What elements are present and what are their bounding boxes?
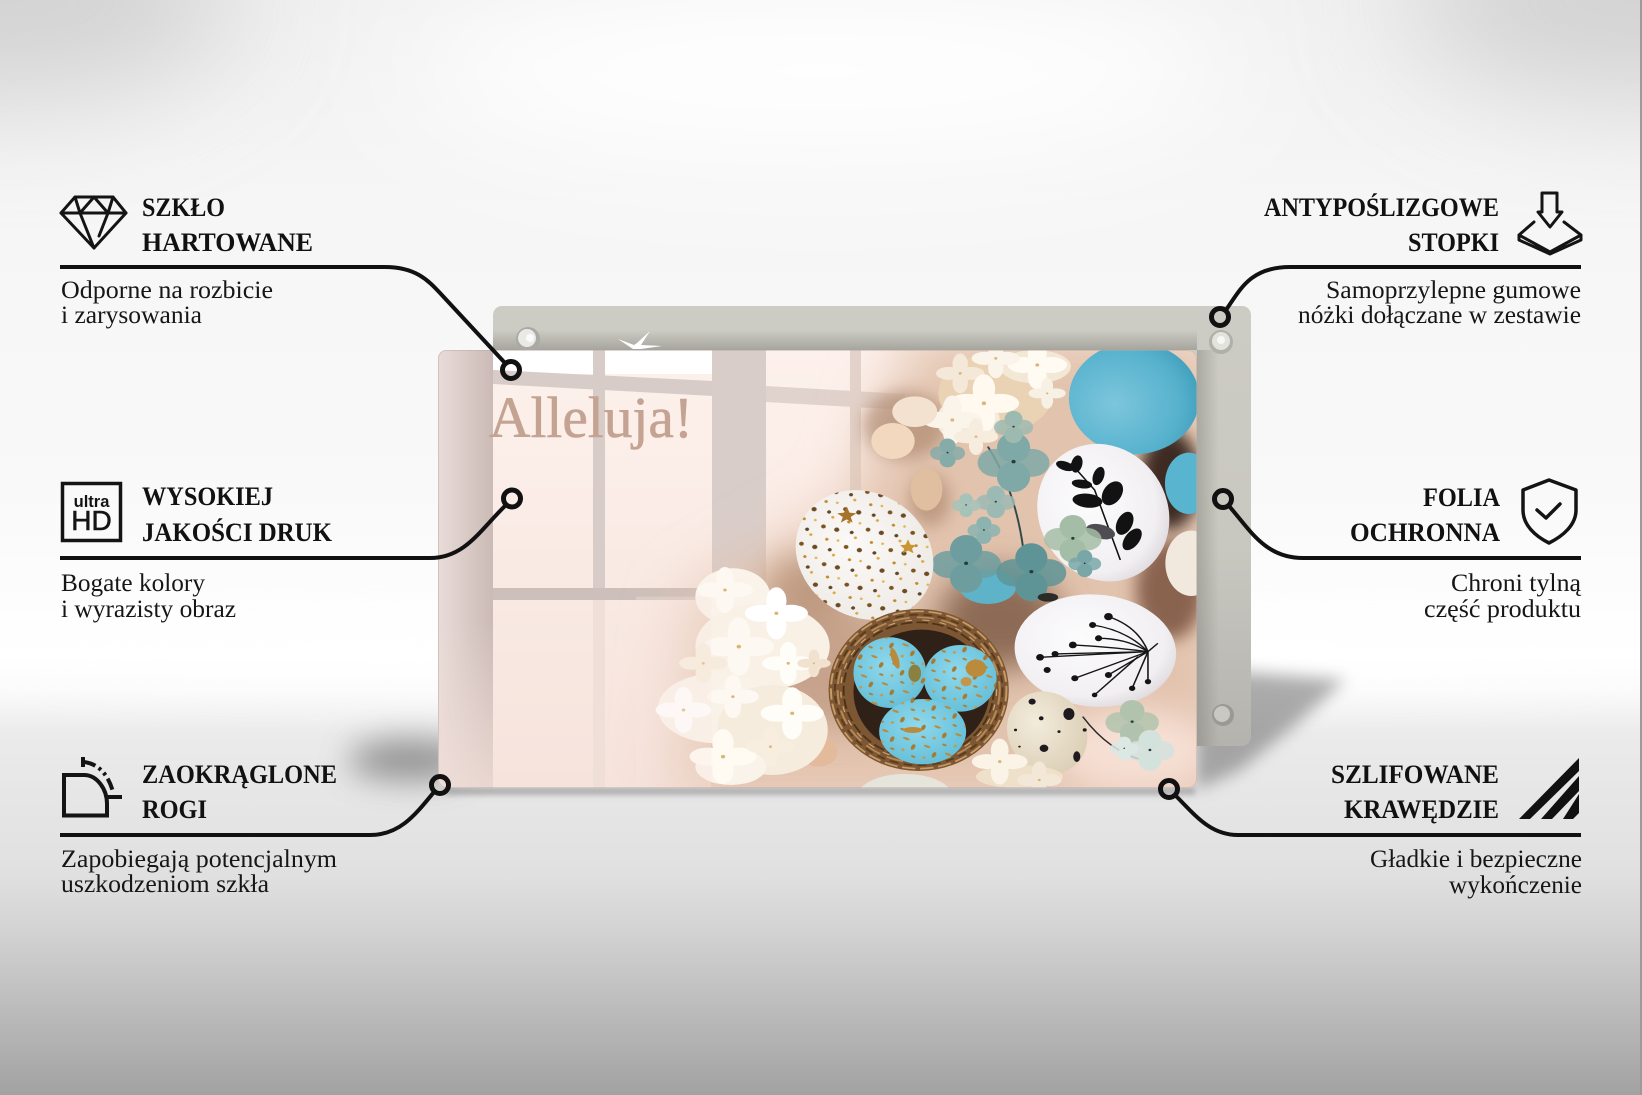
icon: ultra HD: ultra (74, 493, 110, 511)
icon: small tan eggs (800, 396, 942, 767)
icon: diagonal stripes (1519, 758, 1579, 819)
heading: JAKOŚCI DRUK (142, 518, 333, 547)
heading: STOPKI (1408, 228, 1499, 257)
heading (1264, 193, 1499, 257)
icon: big blue egg (1069, 342, 1199, 454)
icon: mounting bolt top right (1209, 330, 1233, 354)
leader line (1214, 490, 1581, 558)
icon: gold dotted egg (796, 490, 934, 620)
icon: shield (1523, 480, 1576, 543)
heading: SZKŁO (142, 193, 225, 222)
heading (1350, 483, 1500, 547)
icon: small blue egg (1164, 452, 1197, 514)
leader line (1212, 267, 1581, 326)
icon: speckled quail egg (1007, 691, 1088, 772)
callout: rounded corners (60, 757, 448, 898)
flowers: lower left cream hydrangea (656, 567, 831, 785)
description (61, 277, 273, 329)
leader line (1160, 780, 1581, 835)
icon: glare sparkle (618, 331, 662, 349)
callout: protective film (1214, 480, 1582, 623)
panel: front glass print (438, 350, 1197, 788)
cast shadows (348, 672, 1345, 795)
heading (142, 760, 337, 824)
description: Odporne na rozbicie (61, 277, 273, 304)
description: Zapobiegają potencjalnym (61, 846, 338, 873)
description: Chroni tylną (1451, 570, 1582, 597)
icon: diamond (61, 197, 126, 248)
flowers: small sage hydrangea (1083, 700, 1175, 771)
description: uszkodzeniom szkła (61, 871, 269, 898)
description: Gładkie i bezpieczne (1370, 846, 1582, 873)
heading (142, 482, 333, 547)
icon: twig nest (829, 609, 1009, 771)
heading: WYSOKIEJ (142, 482, 273, 511)
icon: rounded corner (64, 757, 122, 816)
illustration: easter eggs and flowers (636, 338, 1218, 819)
window reflection over flowers (636, 597, 711, 790)
icon: arrow onto pad (1519, 193, 1581, 254)
flowers: bottom cream petals (972, 738, 1063, 788)
leader line (60, 490, 520, 558)
icon: cream egg (1165, 530, 1197, 596)
description (61, 846, 338, 898)
text: Alleluja on glass: Alleluja! (489, 385, 693, 450)
heading (142, 193, 313, 257)
soft shadows and floor (725, 391, 1215, 792)
left translucent strip (438, 350, 493, 788)
heading: ZAOKRĄGLONE (142, 760, 337, 789)
description (1370, 846, 1582, 899)
callout: high quality print (60, 482, 520, 623)
description (1424, 570, 1582, 623)
leader line (60, 267, 520, 378)
description: Samoprzylepne gumowe (1326, 277, 1581, 304)
description: i zarysowania (61, 302, 202, 329)
description (1298, 277, 1581, 329)
heading: ROGI (142, 795, 207, 824)
callout: anti-slip feet (1212, 193, 1581, 329)
description (61, 570, 236, 623)
heading: ANTYPOŚLIZGOWE (1264, 193, 1499, 222)
window reflection (493, 350, 898, 678)
description: Bogate kolory (61, 570, 205, 597)
icon: mounting bolt bottom right (1212, 704, 1234, 726)
heading: HARTOWANE (142, 228, 313, 257)
tan table surface (654, 350, 1197, 788)
callout: ground edges (1160, 758, 1582, 899)
description: nóżki dołączane w zestawie (1298, 302, 1581, 329)
description: część produktu (1424, 596, 1582, 623)
flowers: top cream hydrangea (926, 350, 1071, 455)
heading (1331, 760, 1499, 824)
description: i wyrazisty obraz (61, 596, 236, 623)
icon: ultra HD (62, 484, 120, 540)
heading: KRAWĘDZIE (1344, 795, 1499, 824)
callout: hardened glass (60, 193, 520, 378)
panel: back glass plate (493, 306, 1251, 746)
description: wykończenie (1449, 872, 1582, 899)
icon: white egg with black leaves (1037, 444, 1170, 582)
heading: OCHRONNA (1350, 518, 1500, 547)
leader line (60, 776, 448, 835)
icon: blue eggs in nest (853, 637, 997, 764)
heading: FOLIA (1423, 483, 1500, 512)
heading: SZLIFOWANE (1331, 760, 1499, 789)
icon: ultra HD: HD (71, 505, 112, 536)
icon: partial egg at bottom edge (862, 774, 948, 788)
icon: white egg with black branch (1014, 594, 1176, 707)
flowers: teal hydrangea (930, 411, 1102, 604)
icon: mounting bolt top left (516, 327, 540, 351)
